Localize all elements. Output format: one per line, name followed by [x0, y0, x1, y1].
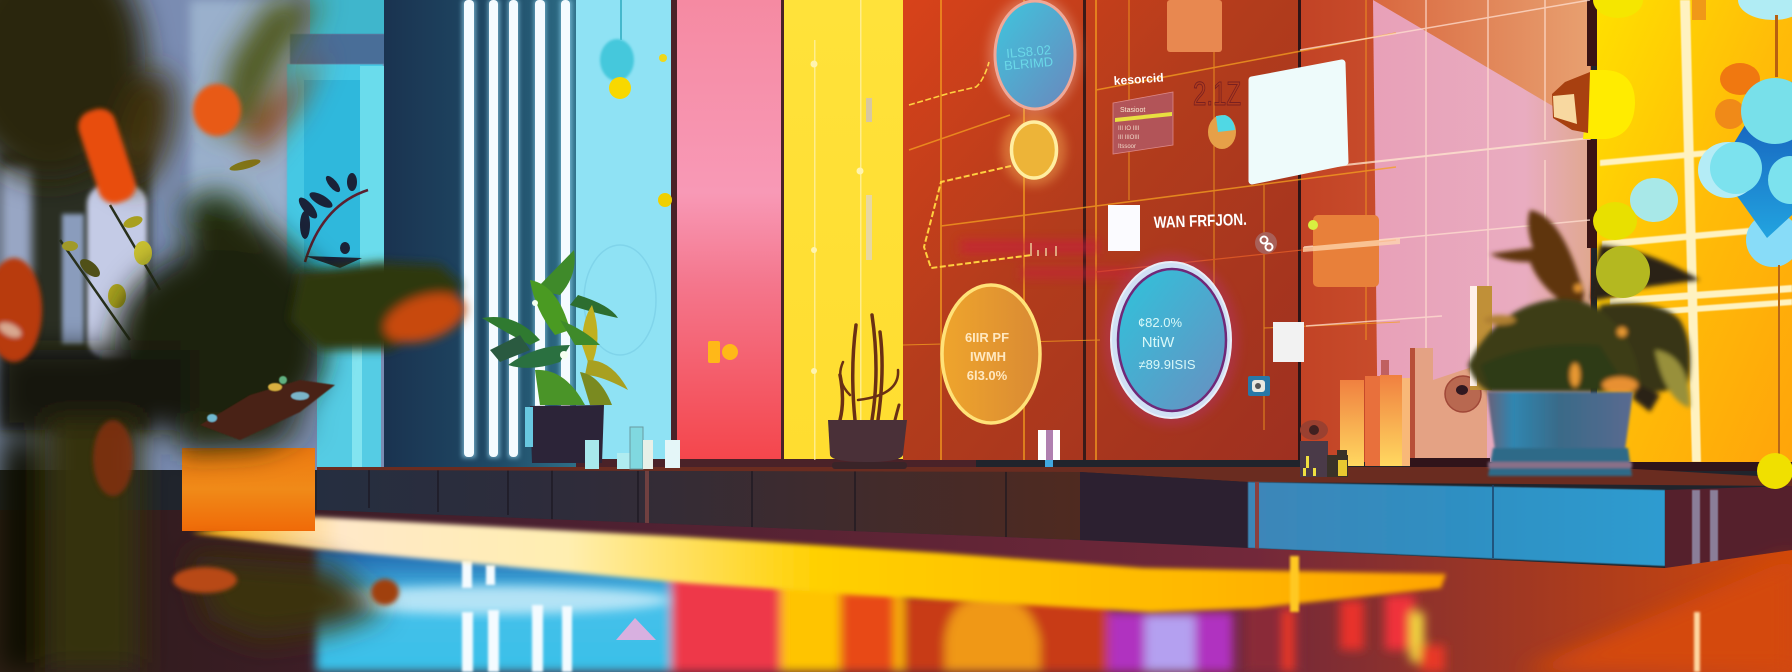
circle: large orange: 6l3.0% — [967, 368, 1008, 383]
dark frame post — [1083, 0, 1597, 460]
floor reflection: light streaks — [462, 560, 1700, 672]
right olive disc — [1596, 246, 1650, 298]
white mini bars — [1038, 430, 1060, 468]
circle text: ILS8.02 — [1006, 42, 1052, 61]
floor reflection: pale haze — [310, 586, 670, 614]
wedge: salmon upper — [1373, 0, 1590, 128]
card: white lower — [1273, 322, 1304, 362]
plant: green potted — [482, 250, 628, 463]
card: lower orange — [1313, 215, 1379, 287]
cyan ornament with yellow bead — [584, 0, 672, 355]
mini city: dark block — [1300, 441, 1348, 477]
red glow band — [960, 240, 1130, 278]
card: small white — [1108, 205, 1140, 251]
circle: large orange: IWMH — [970, 349, 1006, 364]
right decor: coloured dots — [1593, 0, 1760, 240]
light streak across card — [1303, 238, 1400, 252]
card: upper orange — [1167, 0, 1222, 52]
mini table: Stasioot — [1120, 107, 1145, 114]
baseboard right — [1410, 458, 1792, 471]
floor light strip — [191, 517, 1446, 612]
plant: small sharp leaves left — [60, 157, 261, 340]
label: 2.1Z: 2.1Z — [1193, 75, 1241, 112]
pink panel yellow marks — [708, 341, 738, 363]
mini table: Itssoor — [1118, 144, 1136, 150]
neon light stripes — [462, 0, 572, 458]
floor reflection: triangle — [616, 618, 656, 640]
yellow panel dotted lines — [810, 0, 872, 460]
plant: dark sharp window sprig — [296, 173, 368, 268]
bench: blue — [1248, 482, 1665, 566]
foreground blurred orange spots — [0, 84, 399, 605]
dark navy column — [384, 0, 576, 468]
panel: amber right — [1597, 0, 1792, 462]
mini table — [1113, 92, 1173, 154]
bench: blue seams — [1257, 482, 1493, 558]
reddish sprig under leaf — [200, 376, 335, 440]
circle: top blue: BLRIMD — [1003, 54, 1054, 73]
heading: WAN FRFJON: WAN FRFJON. — [1154, 211, 1247, 232]
floor orange sheen — [1520, 558, 1792, 672]
label: keyword: kesorcid — [1113, 71, 1164, 88]
mini table: III IO IIII — [1118, 126, 1140, 132]
panel: red data wall — [903, 0, 1301, 460]
circle: small yellow — [1002, 114, 1066, 186]
bench top surface — [317, 467, 1792, 486]
card: large white — [1252, 63, 1345, 181]
panel: pink glass — [1373, 0, 1590, 462]
bench: dark red end — [1665, 486, 1792, 568]
shelf: orange block — [182, 448, 315, 531]
bench: dark middle — [1080, 472, 1248, 548]
panel: pink — [677, 0, 781, 459]
bench: end highlights — [1692, 490, 1718, 566]
panel dividers — [576, 0, 976, 468]
right decor: yellow half-disc and cube — [1552, 70, 1635, 139]
circle: top blue — [988, 0, 1080, 115]
pink glass grid lines — [1300, 0, 1590, 385]
plant: twig bowl — [828, 315, 907, 469]
circle: large orange — [942, 285, 1040, 423]
floor — [0, 510, 1792, 672]
small tick marks — [1031, 243, 1056, 256]
right plant leaves — [1468, 210, 1700, 412]
panel: salmon wall — [1301, 0, 1591, 462]
icon: link badge — [1255, 232, 1277, 254]
wall grid lines — [903, 0, 1400, 460]
foreground blurred plant — [0, 0, 385, 672]
orange circle text: 6IIR PF — [965, 330, 1009, 345]
right pot — [1487, 392, 1633, 476]
circle: large blue: NtiW — [1142, 334, 1175, 351]
small cylinders — [585, 427, 680, 469]
right decor: blue diamond cluster — [1698, 0, 1792, 455]
dashed connector lines — [909, 62, 1032, 268]
panel: cyan — [576, 0, 671, 462]
pie chart — [1208, 115, 1236, 149]
foreground blurred leaf tip — [290, 262, 472, 352]
panel: yellow — [783, 0, 903, 459]
yellow drop bottom right — [1757, 453, 1792, 489]
bench: dark left — [317, 469, 1080, 540]
plant: right potted — [1468, 210, 1700, 476]
mini city: buildings — [1300, 286, 1492, 466]
circle: large blue: ≠89.9ISIS — [1138, 357, 1196, 372]
right decor: glowing lines — [1600, 0, 1792, 462]
window: cyan panes — [287, 0, 387, 468]
pot — [530, 405, 604, 463]
floor reflection: panels — [316, 548, 1445, 672]
blue circle text: ¢82.0% — [1138, 315, 1182, 330]
strip reflected post — [1290, 556, 1299, 612]
bench seams — [369, 469, 1006, 538]
circle: large blue — [1103, 254, 1239, 426]
leaves — [482, 250, 628, 405]
green indicator dot — [1308, 220, 1318, 230]
mini table: III IIIOIII — [1118, 135, 1140, 141]
icon: camera badge — [1248, 376, 1270, 396]
